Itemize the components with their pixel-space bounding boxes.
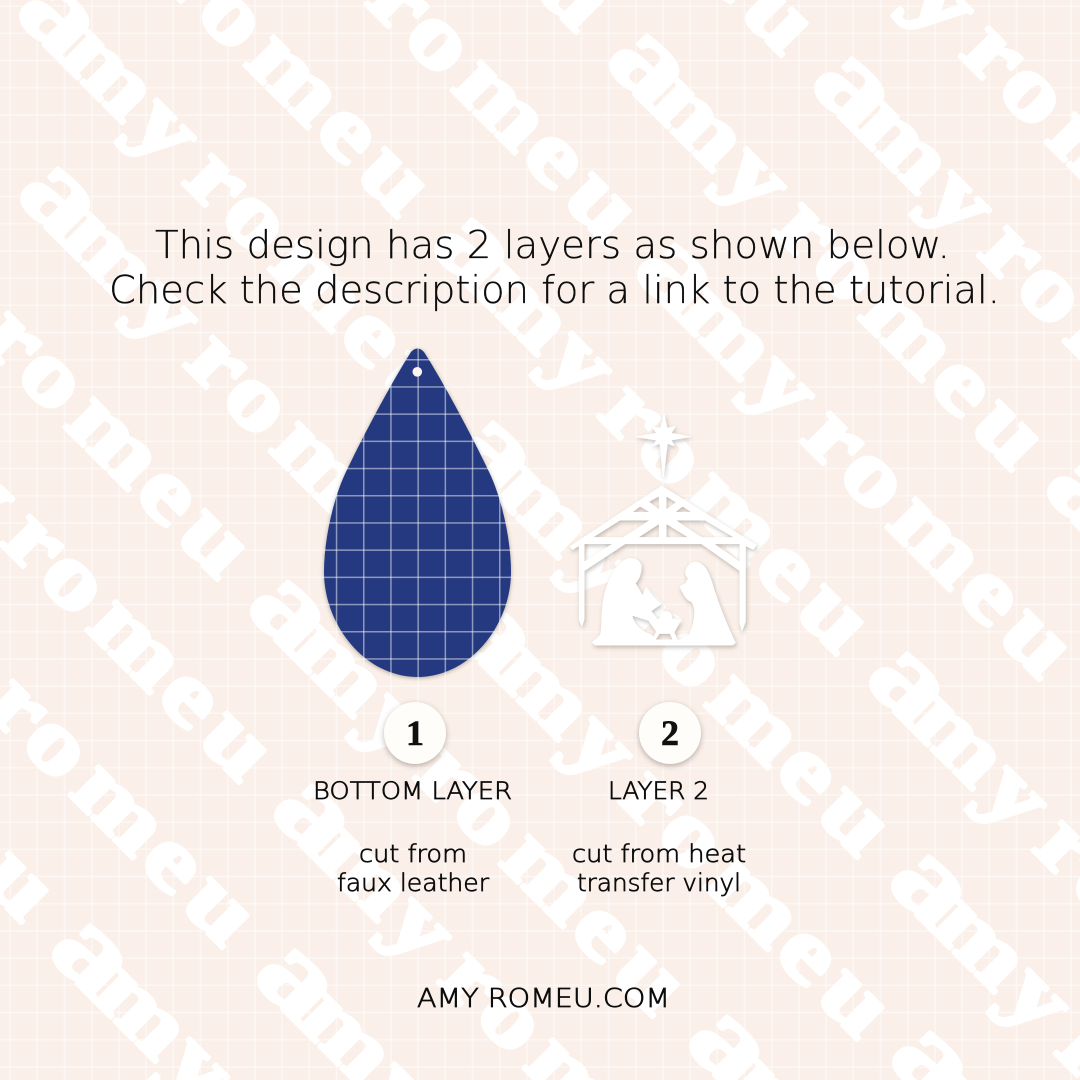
icon: Mary figure [593,559,661,642]
icon: Joseph figure [675,562,735,642]
watermark pattern: repeated diagonal amy romeu wordmarks: a [226,539,363,676]
heading: bottom layer: BOTTOM LAYER [313,777,512,805]
watermark pattern: repeated diagonal amy romeu wordmarks: a [613,202,750,339]
watermark pattern: repeated diagonal amy romeu wordmarks: my romeu [633,51,1069,487]
stable floor [593,640,735,645]
watermark pattern: repeated diagonal amy romeu wordmarks: my romeu [274,597,710,1033]
column: layer 1 label [313,702,512,897]
watermark pattern: repeated diagonal amy romeu wordmarks: my romeu [458,235,894,671]
number badge 2: 2 [661,713,679,753]
number badge 2 [639,702,701,764]
icon: stable roof and beams [570,486,756,549]
watermark pattern: repeated diagonal amy romeu wordmarks: a [0,126,133,263]
layer 1: navy teardrop earring with hole [324,348,511,677]
watermark pattern: repeated diagonal amy romeu wordmarks: my romeu [479,620,915,1056]
watermark pattern: repeated diagonal amy romeu wordmarks: a [431,562,568,699]
watermark pattern: repeated diagonal amy romeu wordmarks: a [250,743,387,880]
icon: star of Bethlehem [636,414,690,477]
icon: baby in manger [649,612,681,640]
watermark pattern: repeated diagonal amy romeu wordmarks: a [233,908,370,1045]
column: layer 2 label [572,702,746,897]
watermark pattern: repeated diagonal amy romeu wordmarks: a [28,883,165,1020]
description: cut from faux leather: faux leather [337,869,489,897]
number badge 1: 1 [406,713,424,753]
watermark pattern: repeated diagonal amy romeu wordmarks: a [410,177,547,314]
description: cut from heat transfer vinyl: transfer vinyl [577,869,741,897]
description: cut from faux leather: cut from [359,840,467,868]
footer: website: AMY ROMEU.COM [417,984,670,1014]
stable posts and braces [579,544,745,630]
number badge 1 [384,702,446,764]
heading: layer 2: LAYER 2 [608,777,709,805]
title line 2: Check the description for a link to the tutorial. [109,268,1000,312]
watermark pattern: repeated diagonal amy romeu wordmarks: my romeu [479,438,915,874]
description: cut from heat transfer vinyl [572,840,746,897]
description: cut from faux leather [337,840,489,897]
watermark pattern: repeated diagonal amy romeu wordmarks: my romeu [44,184,480,620]
watermark pattern: repeated diagonal amy romeu wordmarks: a [845,611,982,748]
description: cut from heat transfer vinyl: cut from heat [572,840,746,868]
watermark pattern: repeated diagonal amy romeu wordmarks: a [431,380,568,517]
layer 2: white nativity cut-out with star and stable [570,414,756,645]
watermark pattern: repeated diagonal amy romeu wordmarks: a [867,814,1004,951]
watermark pattern: repeated diagonal amy romeu wordmarks: my romeu [43,2,479,438]
title [109,223,1000,312]
title line 1: This design has 2 layers as shown below. [155,223,950,267]
watermark pattern: repeated diagonal amy romeu wordmarks: a [790,16,927,153]
